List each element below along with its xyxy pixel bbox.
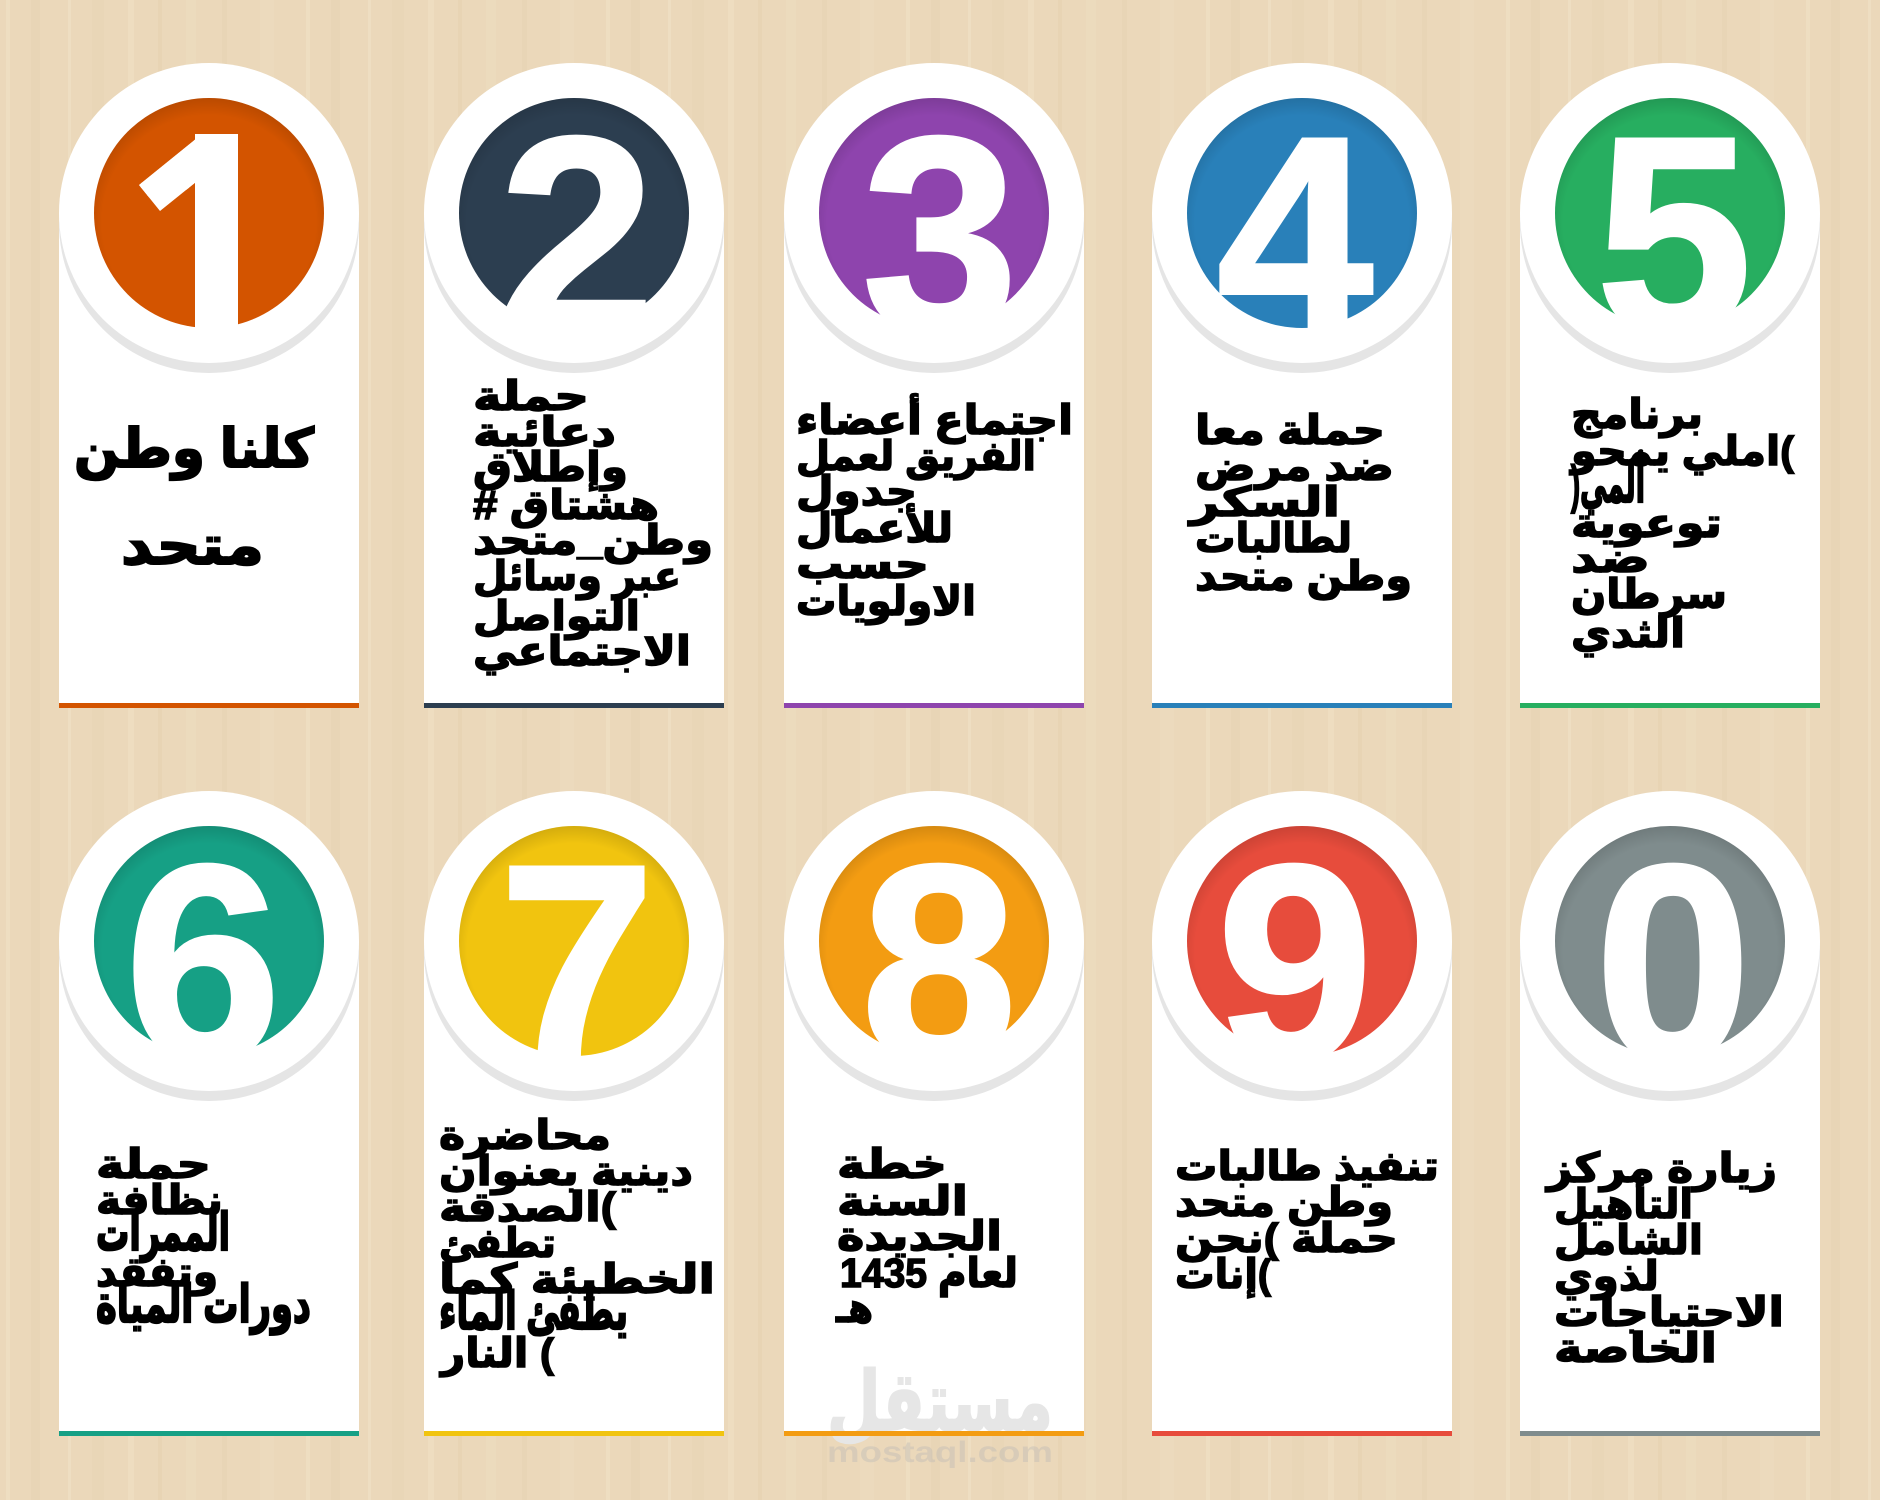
watermark: mostaql xyxy=(784,1355,1084,1469)
text: card 9 xyxy=(1175,1143,1439,1299)
text: card 7: ) النار xyxy=(439,1330,554,1377)
text: card 2: وإطلاق xyxy=(473,444,628,492)
text: card 6: نظافة xyxy=(96,1177,223,1223)
number badge 3: 3 xyxy=(862,78,1018,393)
number badge 8: 8 xyxy=(861,806,1017,1121)
number badge 1 xyxy=(94,98,324,328)
text: card 3: حسب xyxy=(796,541,929,587)
text: card 3: جدول xyxy=(796,468,917,516)
number badge 8 xyxy=(819,806,1049,1121)
panel: card 4 xyxy=(1152,63,1452,708)
panel: card 3 xyxy=(784,63,1084,708)
number badge 1: 1 xyxy=(122,78,278,393)
number badge 6 xyxy=(94,806,324,1121)
text: card 5: ضد xyxy=(1571,535,1650,581)
text: card 4: لطالبات xyxy=(1195,515,1352,561)
text: card 4: وطن متحد xyxy=(1195,553,1412,601)
text: card 1: متحد xyxy=(121,516,264,576)
number badge 4: 4 xyxy=(1217,78,1375,393)
text: card 5: توعوية xyxy=(1571,500,1722,547)
text: card 6: الممرات xyxy=(96,1204,230,1263)
text: card 8: لعام 1435 xyxy=(840,1250,1018,1298)
number badge 5 xyxy=(1555,78,1785,393)
text: card 3: للأعمال xyxy=(796,502,953,551)
text: card 0: التأهيل xyxy=(1554,1177,1693,1227)
text: card 7 xyxy=(439,1112,715,1377)
text: card 0: الاحتياجات xyxy=(1554,1289,1784,1335)
text: card 9: تنفيذ طالبات xyxy=(1175,1143,1439,1189)
number badge 9: 9 xyxy=(1217,806,1373,1121)
text: card 5: سرطان xyxy=(1571,571,1727,618)
text: card 4: حملة معا xyxy=(1195,407,1385,453)
number badge 5: 5 xyxy=(1596,78,1752,393)
text: card 2: عبر وسائل xyxy=(473,553,681,601)
text: card 0 xyxy=(1545,1145,1784,1371)
text: card 4: ضد مرض xyxy=(1195,443,1394,490)
text: card 7: )الصدقة xyxy=(439,1184,616,1230)
text: card 8: الجديدة xyxy=(837,1213,1002,1259)
number badge 4 xyxy=(1187,78,1417,393)
number badge 0: 0 xyxy=(1595,806,1751,1121)
panel: card 0 xyxy=(1520,791,1820,1436)
panel: card 2 xyxy=(424,63,724,708)
panel: card 5 xyxy=(1520,63,1820,708)
number badge 0 xyxy=(1555,806,1785,1121)
text: card 9: )إنات xyxy=(1175,1251,1271,1299)
text: card 8: السنة xyxy=(837,1178,968,1224)
text: card 9: حملة )نحن xyxy=(1175,1215,1398,1262)
text: card 2: وطن_متحد xyxy=(473,517,713,565)
text: card 2: هشتاق # xyxy=(473,482,659,528)
text: card 3: اجتماع أعضاء xyxy=(796,393,1073,444)
text: card 1: كلنا وطن xyxy=(74,419,315,480)
text: card 0: الشامل xyxy=(1554,1217,1703,1263)
text: card 0: الخاصة xyxy=(1554,1325,1717,1371)
watermark: mostaql: mostaql.com xyxy=(827,1436,1053,1469)
text: card 2: الاجتماعي xyxy=(473,628,691,675)
text: card 8: خطة xyxy=(837,1141,947,1187)
text: card 8: هـ xyxy=(835,1285,873,1331)
text: card 2: حملة xyxy=(473,373,589,419)
number badge 2 xyxy=(459,78,689,393)
text: card 0: زيارة مركز xyxy=(1545,1145,1777,1192)
text: card 2 xyxy=(473,373,713,675)
panel: card 9 xyxy=(1152,791,1452,1436)
panel: card 8 xyxy=(784,791,1084,1469)
text: card 8 xyxy=(835,1141,1018,1331)
text: card 7: يطفئ الماء xyxy=(439,1283,628,1341)
text: card 9: وطن متحد xyxy=(1175,1179,1393,1227)
watermark: mostaql: مستقل xyxy=(827,1355,1053,1450)
text: card 4 xyxy=(1188,407,1412,601)
number badge 3 xyxy=(819,78,1049,393)
number badge 2: 2 xyxy=(499,78,655,393)
text: card 7: تطفئ xyxy=(439,1220,556,1266)
text: card 6 xyxy=(96,1141,311,1335)
text: card 6: دورات المياة xyxy=(96,1276,311,1335)
text: card 3: الفريق لعمل xyxy=(796,433,1036,480)
text: card 7: محاضرة xyxy=(439,1112,611,1159)
panel: card 7 xyxy=(424,791,724,1436)
text: card 7: الخطيئة كما xyxy=(439,1256,715,1302)
text: card 5: )املي يمحو xyxy=(1569,428,1794,475)
text: card 2: التواصل xyxy=(473,593,640,640)
text: card 7: دينية بعنوان xyxy=(439,1148,693,1195)
text: card 4: السكر xyxy=(1188,479,1340,526)
text: card 1 xyxy=(74,419,315,576)
text: card 5: الثدي xyxy=(1571,610,1685,657)
number badge 7: 7 xyxy=(499,806,655,1121)
number badge 9 xyxy=(1187,806,1417,1121)
text: card 5 xyxy=(1569,391,1794,657)
panel: card 1 xyxy=(59,63,359,708)
text: card 5: برنامج xyxy=(1571,391,1703,438)
text: card 5: ألمي( xyxy=(1571,450,1645,515)
text: card 6: حملة xyxy=(96,1141,211,1187)
text: card 2: دعائية xyxy=(473,409,616,455)
text: card 3: الاولويات xyxy=(796,578,976,626)
panel: card 6 xyxy=(59,791,359,1436)
text: card 6: وتفقد xyxy=(96,1249,218,1297)
number badge 7 xyxy=(459,806,689,1121)
number badge 6: 6 xyxy=(125,806,281,1121)
text: card 0: لذوي xyxy=(1554,1253,1659,1301)
text: card 3 xyxy=(796,393,1073,626)
